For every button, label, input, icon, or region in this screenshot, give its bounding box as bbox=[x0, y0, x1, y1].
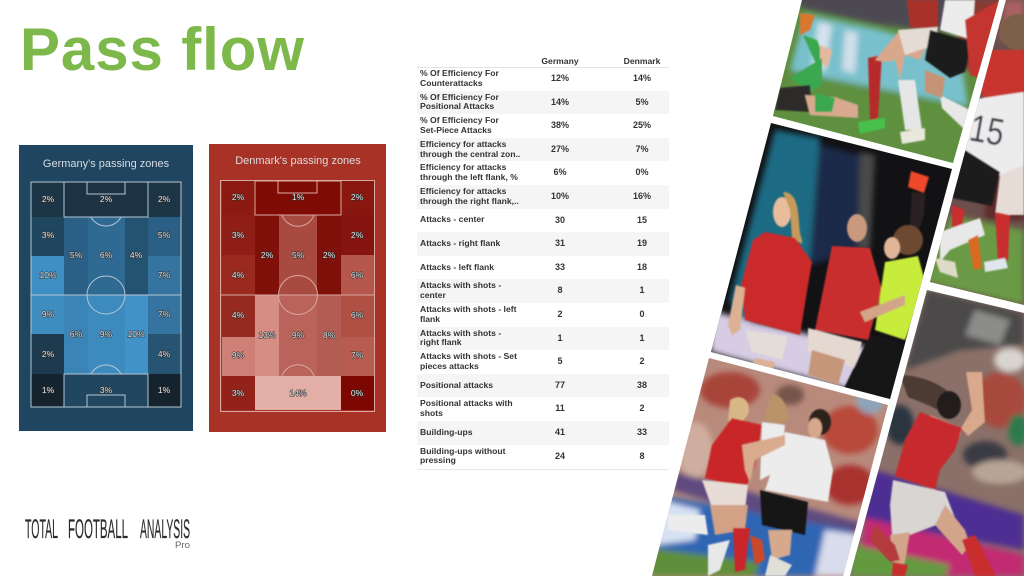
photo collage bbox=[652, 0, 1024, 576]
zone values: Germany: 5% bbox=[158, 230, 171, 240]
row: shots right flank: Attacks with shots - bbox=[420, 328, 501, 338]
row: set-piece efficiency bbox=[420, 115, 651, 135]
row: central zone efficiency: 27% bbox=[551, 144, 569, 154]
row: left flank efficiency: 6% bbox=[553, 167, 566, 177]
row: attacks left flank bbox=[420, 262, 647, 272]
row: positional attacks: 77 bbox=[555, 380, 565, 390]
zone values: Denmark: 3% bbox=[232, 230, 245, 240]
zone values: Denmark bbox=[232, 192, 364, 398]
row: building-ups without pressing: pressing bbox=[420, 455, 456, 465]
zone values: Denmark: 2% bbox=[351, 230, 364, 240]
zones: Denmark bbox=[222, 181, 374, 410]
row: right flank efficiency: Efficiency for attacks bbox=[420, 186, 506, 196]
row: attacks right flank: 19 bbox=[637, 238, 647, 248]
zone values: Denmark: 9% bbox=[292, 330, 305, 340]
logo word: Pro: Pro bbox=[175, 540, 190, 550]
zone values: Germany bbox=[39, 194, 171, 395]
row: shots left flank: 0 bbox=[639, 309, 644, 319]
row: attacks center: 30 bbox=[555, 215, 565, 225]
row: shots center: center bbox=[420, 290, 446, 300]
heading: Denmark: Denmark's passing zones bbox=[235, 155, 361, 167]
zone values: Germany: 2% bbox=[158, 194, 171, 204]
row: positional attacks: Positional attacks bbox=[420, 380, 493, 390]
row: building-ups: 41 bbox=[555, 427, 565, 437]
zone values: Denmark: 14% bbox=[289, 388, 307, 398]
zone values: Denmark: 6% bbox=[351, 310, 364, 320]
title: Pass flow bbox=[20, 16, 305, 83]
table header bbox=[417, 55, 669, 68]
row: set-piece efficiency: Set-Piece Attacks bbox=[420, 125, 492, 135]
zone values: Germany: 2% bbox=[42, 349, 55, 359]
row: central zone efficiency bbox=[417, 138, 669, 161]
row: positional attacks with shots: Positional attacks with bbox=[420, 398, 513, 408]
row: positional attacks with shots: shots bbox=[420, 408, 443, 418]
zone values: Germany: 1% bbox=[42, 385, 55, 395]
photo: German number 15 in a tackle bbox=[925, 0, 1024, 310]
zone values: Germany: 7% bbox=[158, 270, 171, 280]
zone values: Denmark: 2% bbox=[261, 250, 274, 260]
row: right flank efficiency: 10% bbox=[551, 191, 569, 201]
row: attacks center: Attacks - center bbox=[420, 214, 484, 224]
row: shots center bbox=[417, 279, 669, 303]
row: positional attacks: 38 bbox=[637, 380, 647, 390]
row: attacks center bbox=[420, 214, 647, 225]
row: shots set pieces bbox=[420, 351, 644, 371]
photo: German number 15 in a tackle: 15 bbox=[966, 108, 1007, 155]
row: shots set pieces: pieces attacks bbox=[420, 361, 479, 371]
row: attacks left flank: 33 bbox=[555, 262, 565, 272]
row: shots right flank: 1 bbox=[639, 333, 644, 343]
row: positional attacks efficiency: 5% bbox=[635, 97, 648, 107]
row: shots set pieces: Attacks with shots - Set bbox=[420, 351, 517, 361]
row: positional attacks efficiency bbox=[417, 91, 669, 114]
row: shots right flank bbox=[417, 327, 669, 350]
row: attacks right flank: 31 bbox=[555, 238, 565, 248]
zone values: Germany: 10% bbox=[127, 329, 145, 339]
zone values: Denmark: 9% bbox=[232, 350, 245, 360]
row: positional attacks efficiency: % Of Efficiency For bbox=[420, 92, 499, 102]
row: shots left flank: flank bbox=[420, 314, 440, 324]
zone values: Germany: 3% bbox=[42, 230, 55, 240]
zone values: Germany: 9% bbox=[42, 309, 55, 319]
pitch lines: Denmark bbox=[220, 180, 375, 412]
row: right flank efficiency: through the right flank,.. bbox=[420, 196, 519, 206]
row: shots left flank bbox=[420, 304, 644, 324]
row: attacks right flank bbox=[417, 232, 669, 256]
row: counterattacks efficiency: 12% bbox=[551, 73, 569, 83]
row: shots center: Attacks with shots - bbox=[420, 280, 501, 290]
row: shots right flank: right flank bbox=[420, 337, 462, 347]
zone values: Germany: 4% bbox=[158, 349, 171, 359]
zone values: Germany: 6% bbox=[70, 329, 83, 339]
row: central zone efficiency: through the central zon.. bbox=[420, 149, 520, 159]
row: shots center: 1 bbox=[639, 285, 644, 295]
row: building-ups: 33 bbox=[637, 427, 647, 437]
row: shots left flank: Attacks with shots - left bbox=[420, 304, 516, 314]
row: building-ups without pressing: 24 bbox=[555, 451, 565, 461]
row: set-piece efficiency: 38% bbox=[551, 120, 569, 130]
zone values: Denmark: 3% bbox=[232, 388, 245, 398]
row: building-ups without pressing bbox=[420, 446, 644, 465]
pitch lines: Germany bbox=[31, 182, 181, 407]
row: counterattacks efficiency: % Of Efficiency For bbox=[420, 68, 499, 78]
zone values: Germany: 4% bbox=[130, 250, 143, 260]
row: building-ups bbox=[417, 421, 669, 445]
zone values: Germany: 7% bbox=[158, 309, 171, 319]
row: building-ups: Building-ups bbox=[420, 427, 473, 437]
row: shots right flank: 1 bbox=[557, 333, 562, 343]
zone values: Germany: 2% bbox=[42, 194, 55, 204]
row: left flank efficiency: Efficiency for attacks bbox=[420, 162, 506, 172]
zone values: Denmark: 2% bbox=[351, 192, 364, 202]
row: set-piece efficiency: 25% bbox=[633, 120, 651, 130]
table header: Denmark bbox=[624, 56, 660, 66]
row: central zone efficiency: 7% bbox=[635, 144, 648, 154]
zone values: Denmark: 2% bbox=[323, 250, 336, 260]
row: positional attacks with shots: 11 bbox=[555, 403, 565, 413]
photo: Denmark and Germany players running bbox=[650, 355, 890, 576]
photo: referee showing red card bbox=[711, 123, 952, 399]
row: set-piece efficiency: % Of Efficiency For bbox=[420, 115, 499, 125]
panel: Germany's passing zones bbox=[19, 145, 193, 431]
zone values: Denmark: 5% bbox=[292, 250, 305, 260]
zone values: Germany: 10% bbox=[39, 270, 57, 280]
stats table bbox=[417, 56, 669, 470]
zone values: Denmark: 13% bbox=[258, 330, 276, 340]
heading: Germany: Germany's passing zones bbox=[43, 158, 170, 170]
row: right flank efficiency: 16% bbox=[633, 191, 651, 201]
row: positional attacks efficiency: 14% bbox=[551, 97, 569, 107]
zone values: Germany: 9% bbox=[100, 329, 113, 339]
row: shots center: 8 bbox=[557, 285, 562, 295]
table header: Germany bbox=[541, 56, 579, 66]
row: shots left flank: 2 bbox=[557, 309, 562, 319]
zone values: Denmark: 6% bbox=[351, 270, 364, 280]
row: shots set pieces: 5 bbox=[557, 356, 562, 366]
row: shots set pieces: 2 bbox=[639, 356, 644, 366]
row: positional attacks bbox=[417, 374, 669, 397]
zone values: Denmark: 1% bbox=[292, 192, 305, 202]
zone values: Denmark: 0% bbox=[351, 388, 364, 398]
row: positional attacks with shots bbox=[420, 398, 644, 418]
zone values: Denmark: 8% bbox=[323, 330, 336, 340]
zone values: Denmark: 4% bbox=[232, 310, 245, 320]
zone values: Denmark: 7% bbox=[351, 350, 364, 360]
zone values: Denmark: 4% bbox=[232, 270, 245, 280]
logo: Total Football Analysis Pro bbox=[25, 514, 190, 550]
row: attacks right flank: Attacks - right flank bbox=[420, 238, 500, 248]
row: attacks left flank: Attacks - left flank bbox=[420, 262, 494, 272]
row: left flank efficiency bbox=[420, 162, 648, 182]
zone values: Germany: 2% bbox=[100, 194, 113, 204]
photo: goalkeeper on the ground bbox=[770, 0, 1010, 170]
zone values: Germany: 3% bbox=[100, 385, 113, 395]
row: left flank efficiency: through the left flank, % bbox=[420, 172, 518, 182]
zone values: Germany: 6% bbox=[100, 250, 113, 260]
row: attacks left flank: 18 bbox=[637, 262, 647, 272]
zone values: Germany: 5% bbox=[70, 250, 83, 260]
row: counterattacks efficiency bbox=[420, 68, 651, 88]
row: positional attacks with shots: 2 bbox=[639, 403, 644, 413]
zones: Germany bbox=[31, 182, 181, 407]
photo: Danish player with arm raised bbox=[850, 285, 1024, 576]
row: right flank efficiency bbox=[417, 185, 669, 209]
row: counterattacks efficiency: 14% bbox=[633, 73, 651, 83]
row: left flank efficiency: 0% bbox=[635, 167, 648, 177]
zone values: Denmark: 2% bbox=[232, 192, 245, 202]
row: counterattacks efficiency: Counterattacks bbox=[420, 78, 483, 88]
row: attacks center: 15 bbox=[637, 215, 647, 225]
panel: Denmark's passing zones bbox=[209, 144, 386, 432]
row: building-ups without pressing: 8 bbox=[639, 451, 644, 461]
zone values: Germany: 1% bbox=[158, 385, 171, 395]
row: building-ups without pressing: Building-ups without bbox=[420, 446, 505, 456]
row: central zone efficiency: Efficiency for attacks bbox=[420, 139, 506, 149]
logo: Total Football Analysis Pro: TOTAL bbox=[25, 514, 58, 544]
row: positional attacks efficiency: Positional Attacks bbox=[420, 101, 494, 111]
